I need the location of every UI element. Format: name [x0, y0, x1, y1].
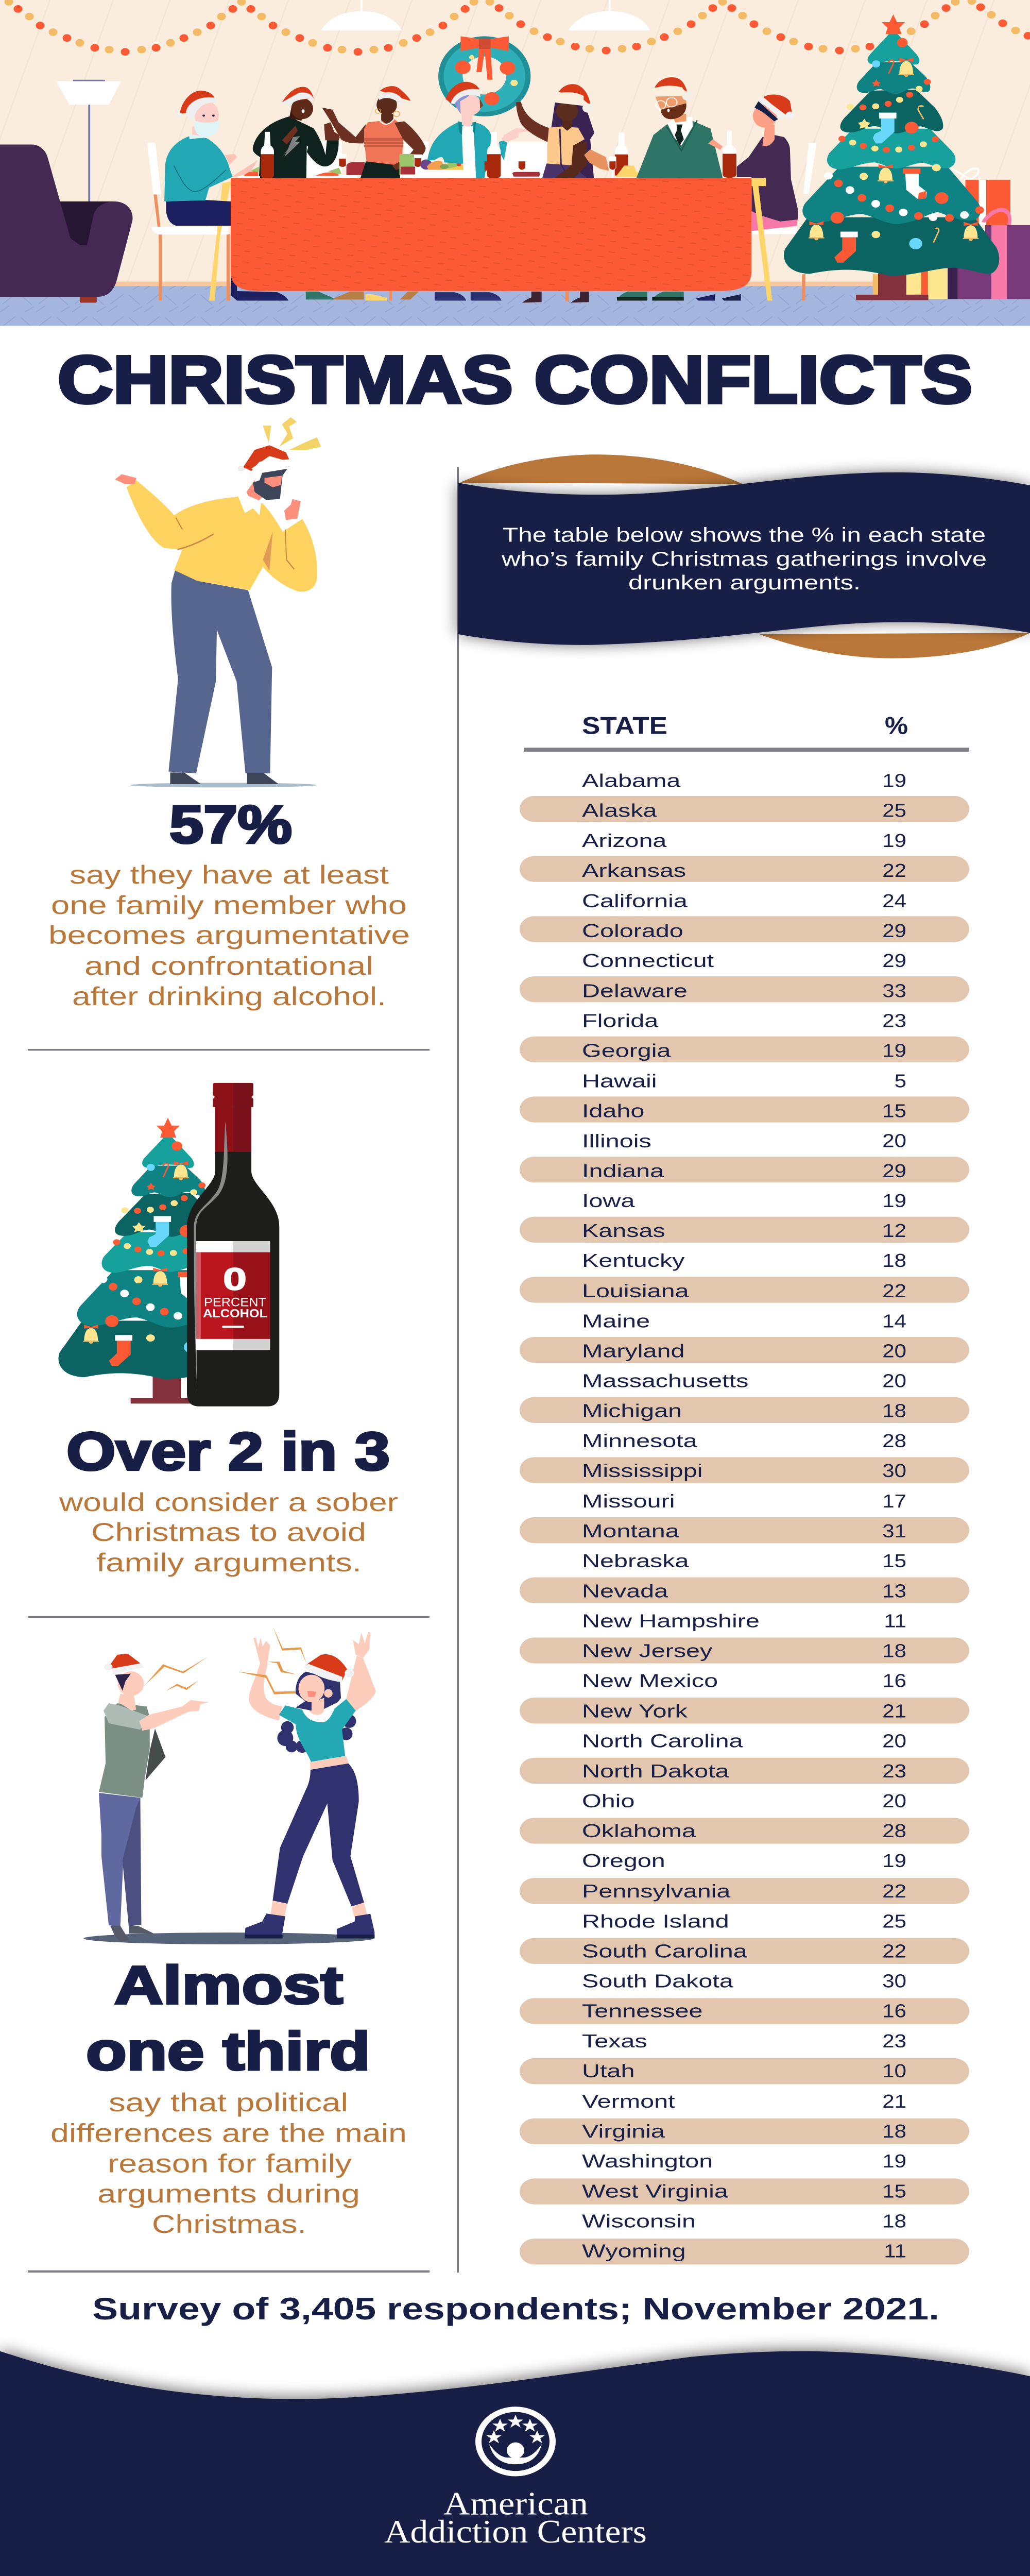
row: Delaware: Delaware: [582, 980, 688, 1002]
row: Maine: Maine: [582, 1311, 650, 1332]
white chairs behind: [404, 141, 547, 178]
row: Wisconsin: 18: [882, 2211, 906, 2232]
row: Missouri: [582, 1490, 906, 1512]
stat heading: [86, 1955, 370, 2081]
row: Virginia: [520, 2119, 969, 2144]
wreath and guests at table centre: [322, 36, 741, 303]
row: Michigan: [520, 1397, 969, 1423]
row: Florida: [582, 1010, 906, 1031]
panel: wavy banner: [458, 454, 1030, 658]
row: Alabama: 19: [882, 770, 906, 791]
divider: [28, 2270, 430, 2273]
row: West Virginia: 15: [882, 2181, 906, 2202]
footer: [0, 2348, 1030, 2576]
row: Illinois: [582, 1130, 906, 1151]
Christmas tree: [784, 14, 999, 300]
row: Mississippi: Mississippi: [582, 1461, 702, 1481]
row: Mississippi: 30: [882, 1460, 906, 1481]
row: Colorado: 29: [882, 921, 906, 941]
row: New Jersey: New Jersey: [582, 1640, 713, 1662]
wine bottle: [261, 132, 274, 178]
row: Maryland: Maryland: [582, 1341, 684, 1362]
stat description: [59, 1487, 398, 1577]
row: Virginia: 18: [882, 2121, 906, 2142]
stat description: arguments during: [97, 2179, 360, 2208]
row: Michigan: 18: [882, 1400, 906, 1421]
pendant lamp left: [321, 0, 402, 30]
row: Utah: 10: [882, 2060, 906, 2081]
hero illustration: family Christmas dinner: [0, 0, 1030, 326]
row: Nebraska: [582, 1551, 906, 1572]
row: Vermont: Vermont: [582, 2091, 675, 2112]
row: Colorado: Colorado: [582, 921, 683, 942]
fruit tray and wine: [400, 154, 479, 178]
row: Idaho: 15: [882, 1100, 906, 1122]
row: Michigan: Michigan: [582, 1400, 682, 1421]
row: Wyoming: 11: [884, 2241, 906, 2262]
panel: over 2 in 3 stat: [59, 1083, 398, 1577]
stat description: family arguments.: [96, 1548, 362, 1577]
row: Rhode Island: [582, 1911, 906, 1932]
armchair: [0, 144, 132, 303]
stat description: reason for family: [108, 2149, 352, 2178]
row: Texas: Texas: [582, 2031, 647, 2052]
row: North Dakota: [520, 1758, 969, 1784]
row: Vermont: 21: [882, 2091, 906, 2112]
row: Alaska: 25: [882, 800, 906, 821]
bottle label: alcohol: ALCOHOL: [203, 1307, 267, 1320]
stat heading: one third: [86, 2021, 370, 2081]
row: Illinois: Illinois: [582, 1130, 651, 1151]
row: West Virginia: West Virginia: [582, 2181, 728, 2202]
row: Kansas: 12: [882, 1221, 906, 1241]
banner text: who’s family Christmas gatherings involve: [501, 548, 987, 570]
guest: woman in coral top: [322, 86, 426, 178]
row: Oregon: Oregon: [582, 1851, 665, 1872]
row: Virginia: Virginia: [582, 2121, 665, 2142]
row: Georgia: Georgia: [582, 1040, 671, 1061]
survey note: Survey of 3,405 respondents; November 2021.: [92, 2291, 939, 2326]
row: Arizona: 19: [882, 830, 906, 851]
row: Tennessee: 16: [882, 2001, 906, 2022]
row: Texas: 23: [882, 2030, 906, 2052]
row: Maine: 14: [882, 1311, 906, 1332]
row: Wisconsin: Wisconsin: [582, 2211, 696, 2232]
wine bottle centre: [485, 132, 501, 178]
row: Massachusetts: [582, 1370, 906, 1392]
small tree: [59, 1118, 274, 1403]
row: Iowa: Iowa: [582, 1191, 635, 1211]
logo wordmark: Addiction Centers: [384, 2513, 647, 2550]
row: Wyoming: Wyoming: [582, 2241, 686, 2262]
row: Hawaii: 5: [895, 1071, 906, 1092]
row: Wyoming: [520, 2239, 969, 2264]
banner text: drunken arguments.: [628, 571, 861, 594]
row: Colorado: [520, 916, 969, 942]
row: Massachusetts: Massachusetts: [582, 1370, 748, 1392]
guest: woman in purple sweater: [737, 95, 817, 234]
row: New Mexico: New Mexico: [582, 1670, 718, 1691]
logo wordmark: American: [443, 2485, 588, 2521]
stat description: differences are the main: [50, 2119, 407, 2148]
stat description: [48, 860, 410, 1011]
shoes: [306, 292, 381, 300]
row: Montana: Montana: [582, 1521, 679, 1542]
table: percent by state: [520, 712, 969, 2264]
row: New Hampshire: 11: [884, 1611, 906, 1632]
row: New York: 21: [882, 1701, 906, 1722]
row: Rhode Island: Rhode Island: [582, 1911, 729, 1932]
row: Pennsylvania: [520, 1878, 969, 1904]
row: Minnesota: [582, 1430, 906, 1451]
bottle label: percent: PERCENT: [204, 1295, 266, 1309]
plate of food: [238, 154, 365, 178]
row: Oregon: 19: [882, 1851, 906, 1872]
row: New York: [520, 1698, 969, 1723]
row: Rhode Island: 25: [882, 1911, 906, 1932]
row: California: 24: [882, 890, 906, 911]
stat description: becomes argumentative: [48, 921, 410, 950]
row: Louisiana: [520, 1277, 969, 1303]
divider: [28, 1049, 430, 1050]
bottle at the table end: [722, 131, 741, 300]
row: Indiana: Indiana: [582, 1161, 664, 1181]
stat description: one family member who: [51, 891, 407, 920]
row: Iowa: 19: [882, 1191, 906, 1211]
row: Arkansas: Arkansas: [582, 860, 686, 881]
banner text: The table below shows the % in each state: [503, 523, 986, 546]
stat description: and confrontational: [84, 952, 373, 980]
title: CHRISTMAS CONFLICTS: [58, 342, 972, 417]
bottle, glass and cheese: [609, 132, 656, 178]
guest: man in black sweater: [253, 87, 342, 178]
row: Montana: [520, 1517, 969, 1543]
row: Pennsylvania: Pennsylvania: [582, 1881, 731, 1902]
row: Washington: Washington: [582, 2151, 713, 2172]
row: Delaware: 33: [882, 980, 906, 1002]
stat heading: Over 2 in 3: [66, 1421, 390, 1481]
row: Nevada: 13: [882, 1581, 906, 1602]
row: Massachusetts: 20: [882, 1370, 906, 1392]
row: Nebraska: 15: [882, 1551, 906, 1571]
stat description: Christmas to avoid: [91, 1518, 366, 1547]
logo wordmark: [384, 2485, 647, 2550]
skirting and floor: [0, 281, 1030, 326]
row: Nebraska: Nebraska: [582, 1551, 689, 1572]
row: South Carolina: 22: [882, 1941, 906, 1962]
wreath: [438, 36, 530, 116]
table with red tablecloth: [231, 178, 751, 291]
chair: [147, 143, 231, 300]
guest: person in teal jacket: [427, 82, 529, 178]
floor lamp: [56, 80, 121, 201]
guest: bearded man in green cardigan: [637, 77, 723, 178]
icon: tree and zero percent alcohol wine bottle: [59, 1083, 279, 1406]
row: Iowa: [582, 1191, 906, 1211]
row: Nevada: Nevada: [582, 1581, 668, 1602]
row: Connecticut: 29: [882, 951, 906, 972]
row: Kentucky: [582, 1250, 906, 1272]
guest: woman with raised arm: [516, 84, 609, 178]
row: Idaho: [520, 1096, 969, 1123]
stat heading: Almost: [114, 1955, 343, 2015]
row: Arizona: Arizona: [582, 831, 667, 851]
garland of lights: [4, 0, 1030, 56]
row: Oregon: [582, 1851, 906, 1872]
banner navy wave: [458, 472, 1030, 645]
row: Arkansas: 22: [882, 860, 906, 881]
row: Florida: 23: [882, 1010, 906, 1031]
row: North Carolina: North Carolina: [582, 1731, 743, 1752]
row: Texas: [582, 2030, 906, 2052]
row: California: California: [582, 891, 688, 911]
wall background: [0, 0, 1030, 286]
woman: [238, 1626, 375, 1939]
stat number: 57%: [169, 794, 292, 854]
row: Maryland: [520, 1337, 969, 1363]
row: South Dakota: [582, 1971, 906, 1992]
row: New Mexico: 16: [882, 1670, 906, 1691]
glass and plate: [512, 157, 540, 177]
row: North Dakota: North Dakota: [582, 1761, 729, 1782]
row: Wisconsin: [582, 2211, 906, 2232]
shoes under the table: [365, 291, 741, 303]
row: Missouri: 17: [882, 1490, 906, 1512]
row: Minnesota: Minnesota: [582, 1431, 697, 1451]
row: Georgia: [520, 1037, 969, 1062]
row: Delaware: [520, 976, 969, 1002]
row: Oklahoma: [520, 1818, 969, 1844]
stat description: after drinking alcohol.: [72, 981, 386, 1011]
row: New York: New York: [582, 1701, 688, 1722]
row: North Carolina: [582, 1731, 906, 1752]
left column divider: [457, 467, 459, 2273]
row: Arkansas: [520, 856, 969, 882]
row: New Hampshire: [582, 1611, 906, 1632]
row: California: [582, 890, 906, 911]
row: Indiana: [520, 1157, 969, 1182]
row: North Dakota: 23: [882, 1760, 906, 1782]
table header: STATE: [582, 712, 667, 739]
row: Louisiana: Louisiana: [582, 1281, 689, 1302]
bottle label: zero: 0: [223, 1262, 247, 1296]
footer navy wave: [0, 2351, 1030, 2576]
row: Missouri: Missouri: [582, 1491, 675, 1512]
row: Arizona: [582, 830, 906, 851]
stat description: would consider a sober: [59, 1487, 398, 1517]
stat description: [50, 2088, 407, 2239]
bottle: [187, 1083, 279, 1406]
row: Nevada: [520, 1578, 969, 1603]
row: North Carolina: 20: [882, 1731, 906, 1752]
row: Alaska: [520, 796, 969, 822]
row: Georgia: 19: [882, 1040, 906, 1061]
row: Oklahoma: Oklahoma: [582, 1821, 696, 1842]
pendant lamp right: [569, 0, 650, 30]
row: Utah: Utah: [582, 2061, 634, 2081]
stat description: Christmas.: [152, 2209, 306, 2239]
row: Ohio: 20: [882, 1791, 906, 1811]
row: Illinois: 20: [882, 1130, 906, 1151]
icon: arguing couple: [83, 1626, 375, 1944]
divider: [28, 1616, 430, 1618]
row: Hawaii: [582, 1071, 906, 1092]
row: Alabama: Alabama: [582, 770, 681, 791]
row: Tennessee: [520, 1998, 969, 2024]
row: Kentucky: Kentucky: [582, 1250, 685, 1272]
row: Washington: 19: [882, 2151, 906, 2172]
row: Mississippi: [520, 1457, 969, 1483]
row: Utah: [520, 2058, 969, 2084]
scene left: floor lamp, armchair and first guests: [0, 80, 381, 303]
banner text: [501, 523, 987, 594]
row: New Jersey: [520, 1637, 969, 1664]
gift boxes: [873, 168, 1030, 299]
row: South Dakota: South Dakota: [582, 1971, 733, 1992]
row: Hawaii: Hawaii: [582, 1071, 657, 1092]
row: Louisiana: 22: [882, 1281, 906, 1302]
row: Kentucky: 18: [882, 1250, 906, 1272]
row: Kansas: Kansas: [582, 1221, 665, 1242]
row: West Virginia: [520, 2178, 969, 2205]
row: Florida: Florida: [582, 1010, 658, 1031]
panel: almost one third stat: [50, 1626, 407, 2239]
row: Maryland: 20: [882, 1341, 906, 1362]
stat description: say that political: [109, 2088, 348, 2117]
row: Pennsylvania: 22: [882, 1881, 906, 1902]
row: New Hampshire: New Hampshire: [582, 1611, 760, 1632]
row: Oklahoma: 28: [882, 1821, 906, 1841]
row: Maine: [582, 1311, 906, 1332]
table leg and chair leg: [751, 178, 805, 300]
panel: 57 percent stat: [48, 417, 410, 1011]
row: Indiana: 29: [882, 1160, 906, 1181]
stat description: say they have at least: [70, 860, 389, 889]
row: Kansas: [520, 1217, 969, 1243]
row: Tennessee: Tennessee: [582, 2001, 703, 2022]
row: Alaska: Alaska: [582, 800, 657, 821]
row: South Dakota: 30: [882, 1971, 906, 1992]
row: Connecticut: Connecticut: [582, 951, 714, 972]
man: [99, 1654, 209, 1942]
row: South Carolina: [520, 1938, 969, 1964]
row: South Carolina: South Carolina: [582, 1941, 747, 1962]
row: New Mexico: [582, 1670, 906, 1691]
guest: older man in teal sweater: [164, 91, 288, 300]
row: New Jersey: 18: [882, 1640, 906, 1662]
table header: %: [885, 712, 908, 739]
icon: angry man in yellow sweater: [115, 417, 321, 787]
row: Vermont: [582, 2091, 906, 2112]
table header: [524, 712, 969, 752]
row: Alabama: [582, 770, 906, 791]
row: Ohio: [582, 1791, 906, 1811]
right scene: guest, gifts and tree: [722, 95, 1030, 300]
icon: American Addiction Centers logo: [478, 2409, 553, 2473]
row: Washington: [582, 2151, 906, 2172]
row: Montana: 31: [882, 1521, 906, 1541]
banner orange arcs: [460, 454, 1030, 658]
row: Minnesota: 28: [882, 1430, 906, 1451]
row: Idaho: Idaho: [582, 1100, 644, 1122]
row: Ohio: Ohio: [582, 1791, 634, 1811]
row: Connecticut: [582, 951, 906, 972]
